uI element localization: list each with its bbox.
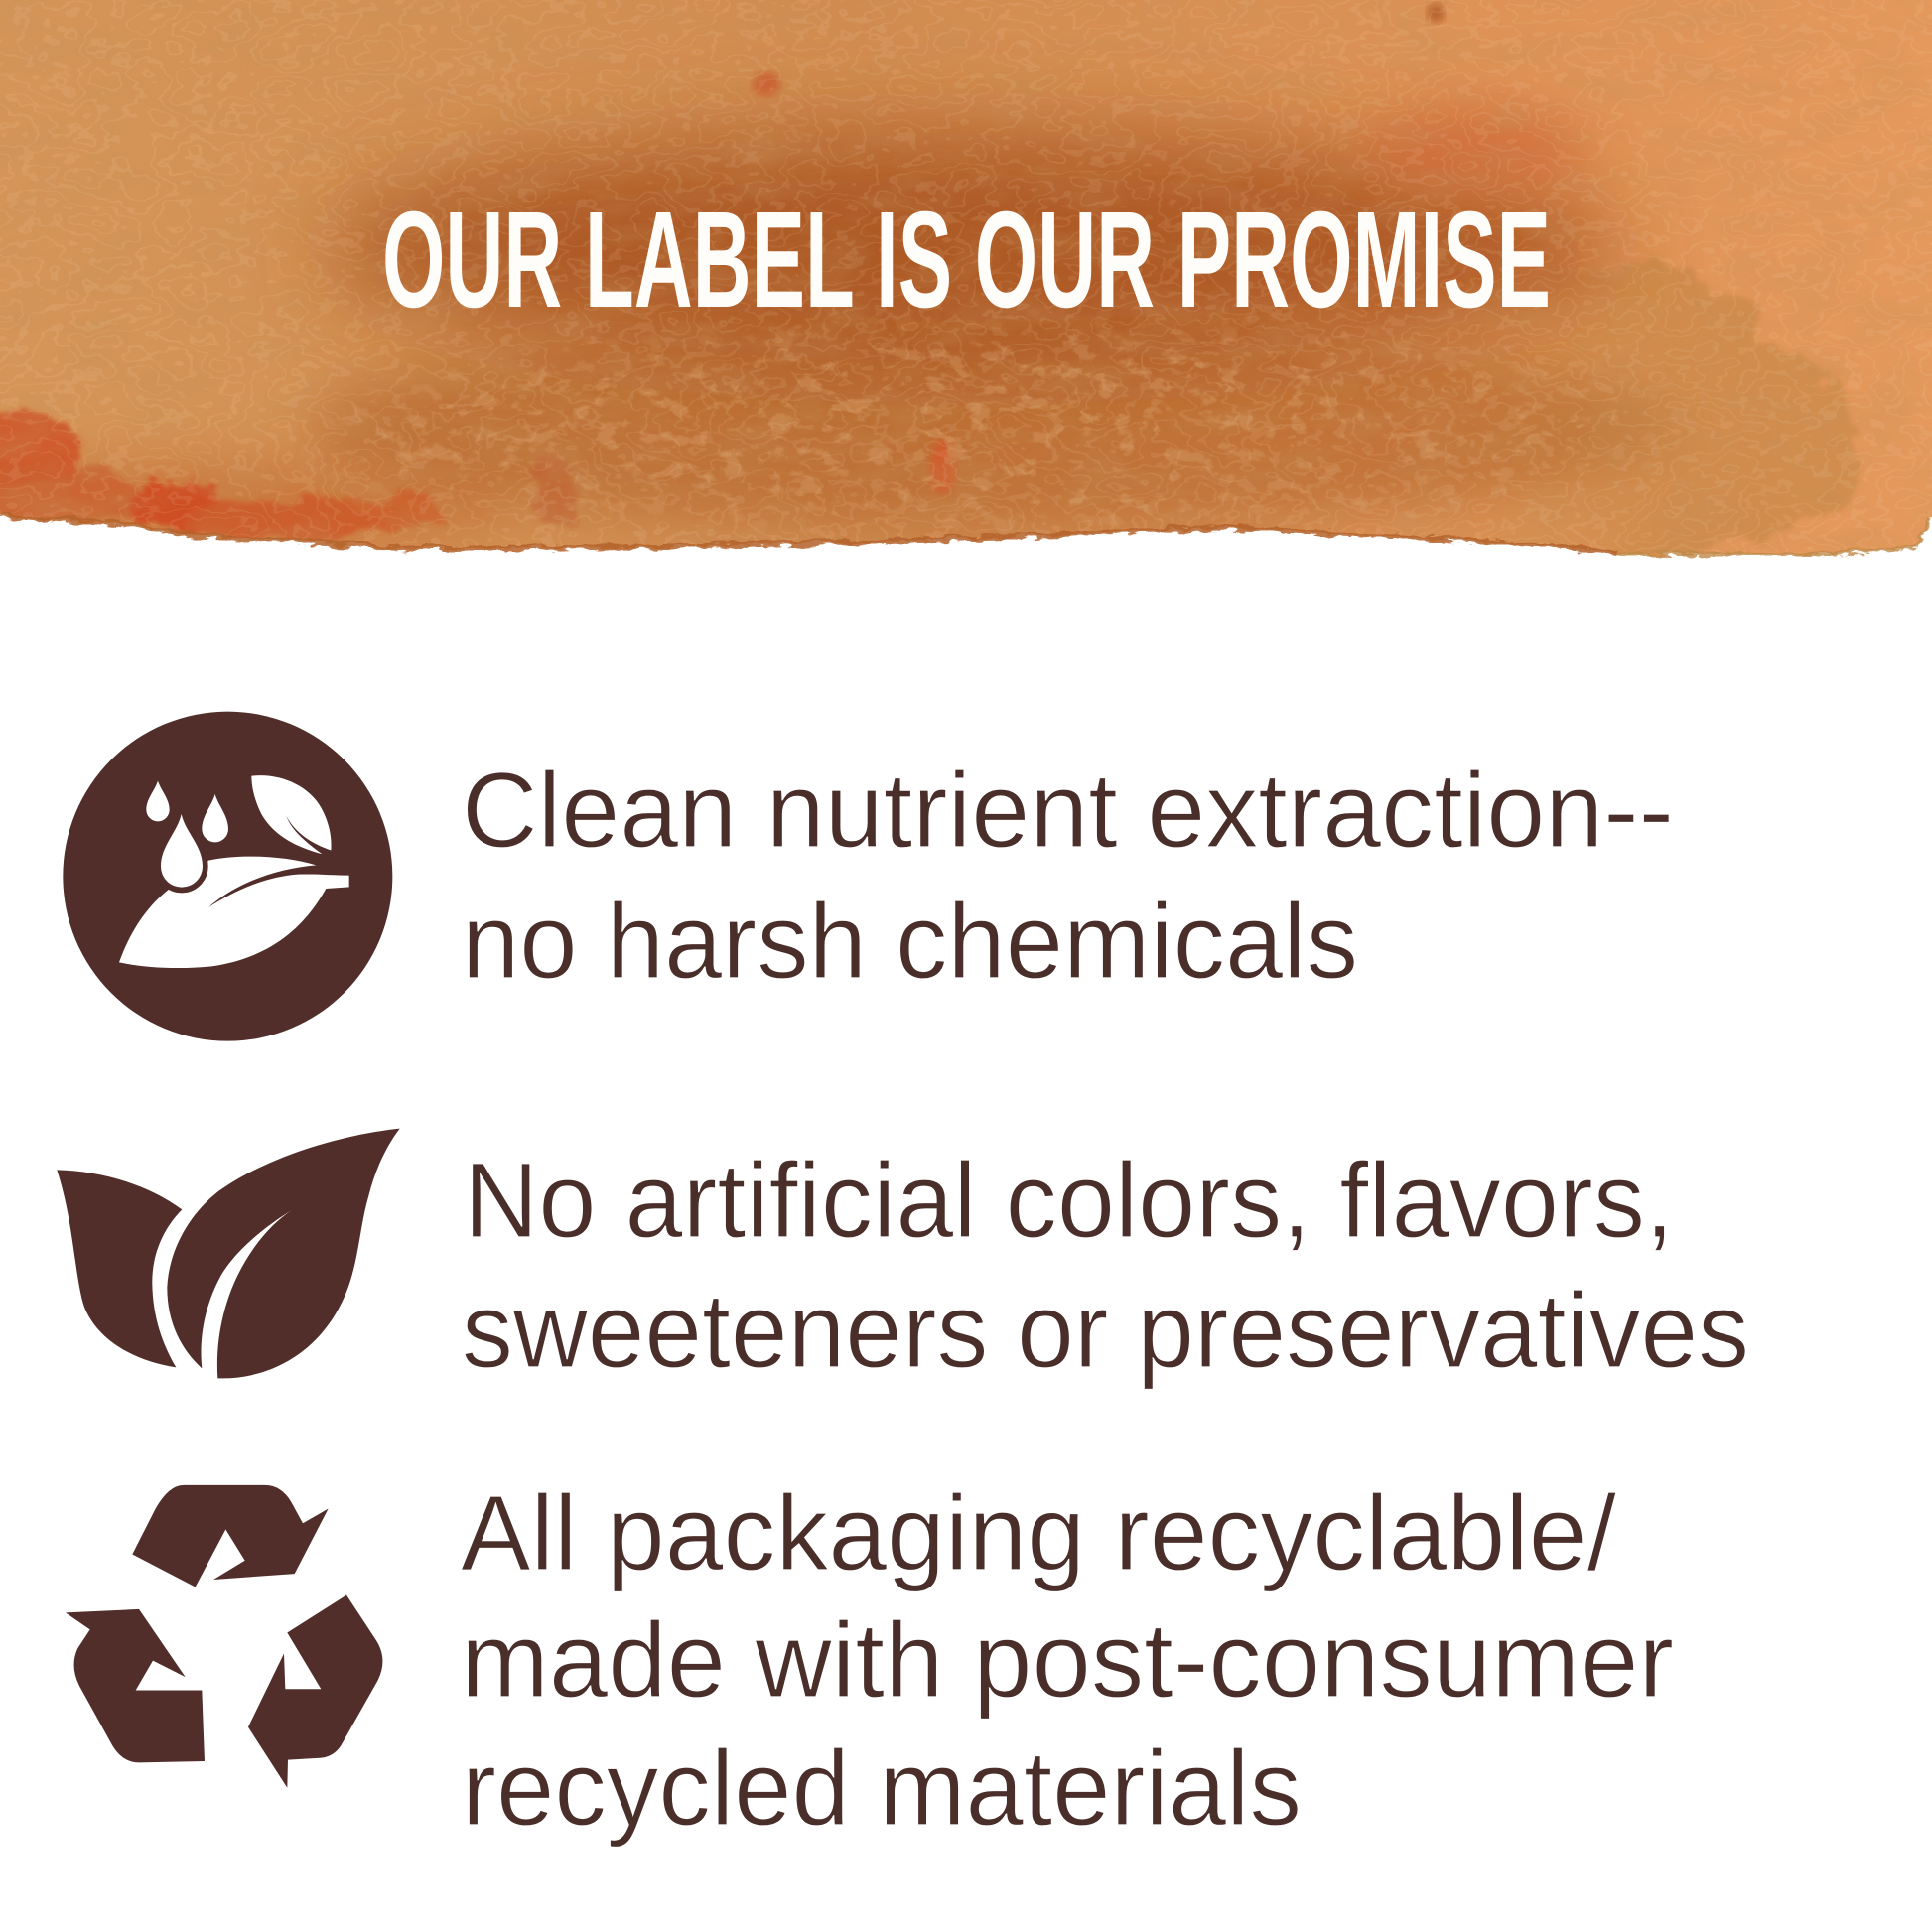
text: all packaging recyclable: recycled materials xyxy=(462,1727,1302,1848)
text: all packaging recyclable: All packaging recyclable/ xyxy=(461,1472,1616,1592)
text: all packaging recyclable: made with post-consumer xyxy=(461,1599,1674,1720)
text: no artificial colors xyxy=(462,1140,1749,1390)
icon: recycling arrows xyxy=(66,1485,382,1788)
text: all packaging recyclable xyxy=(461,1472,1674,1848)
text: no artificial colors: No artificial colors, flavors, xyxy=(464,1140,1674,1260)
banner: watercolor band with torn edge xyxy=(0,0,1932,596)
text: no artificial colors: sweeteners or preservatives xyxy=(462,1270,1749,1390)
text: clean nutrient extraction: Clean nutrient extraction-- xyxy=(462,750,1674,870)
text: clean nutrient extraction: no harsh chemicals xyxy=(462,881,1358,1001)
icon: leaf and water drops in circle xyxy=(63,712,392,1041)
icon: two leaves xyxy=(57,1129,400,1378)
text: clean nutrient extraction xyxy=(462,750,1674,1001)
